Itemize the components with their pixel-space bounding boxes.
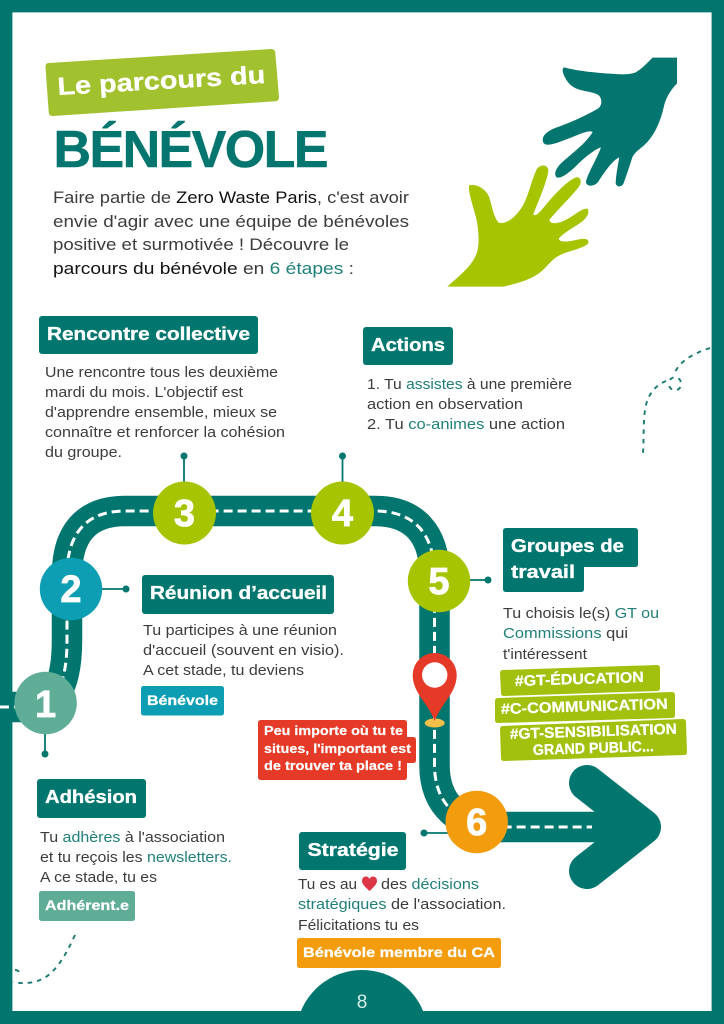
heading: Réunion d’accueil [150,583,327,603]
tag: GT-Sensibilisation: #GT-SENSIBILISATION [510,721,677,743]
text block: Une rencontre tous les deuxième [45,364,278,381]
step 6 [446,791,508,853]
connector 1 [42,730,48,758]
step 6: 6 [466,802,487,844]
icon: reaching hands [447,58,677,287]
text block: des décisions [381,876,479,893]
intro text: positive et surmotivée ! Découvre le [53,235,349,254]
step 5 [408,550,470,612]
badge: Bénévole membre du CA: Bénévole membre du CA [303,944,495,960]
text block: mardi du mois. L'objectif est [45,384,244,401]
intro text: parcours du bénévole en 6 étapes : [53,259,354,278]
text block [298,876,506,934]
badge: Bénévole: Bénévole [147,692,218,708]
tag: GT-Éducation: #GT-ÉDUCATION [515,669,644,690]
step 1: 1 [35,684,56,726]
heading [37,779,146,818]
heading [299,832,406,870]
callout: red message: situes, l'important est [264,742,412,756]
intro text: envie d'agir avec une équipe de bénévoles [53,212,409,231]
text block: d'accueil (souvent en visio). [143,642,344,659]
callout: red message: Peu importe où tu te [264,724,403,738]
panel: Adhésion [37,779,232,921]
tag: GT-Éducation [500,665,660,696]
road [0,511,640,827]
badge: Adhérent.e: Adhérent.e [45,897,129,913]
road centre dashes [0,511,592,827]
page number tab [297,970,427,1024]
heading [363,327,453,365]
badge: Bénévole membre du CA [297,938,501,968]
text block: Tu es au [298,876,357,893]
text block: A cet stade, tu deviens [143,662,304,679]
badge: Adhérent.e [39,891,135,921]
text block: A ce stade, tu es [40,869,157,886]
road arrow head [587,783,643,871]
connector 5 [468,576,492,584]
heading: travail [511,562,575,582]
callout: red message [258,720,416,780]
connector 2 [100,586,130,592]
tag: C-Communication [495,692,675,723]
icon: heart [362,876,377,891]
tag: GT-Sensibilisation: GRAND PUBLIC... [533,738,654,759]
heading: Groupes de [511,536,624,556]
icon: teal hand [543,58,677,186]
text block: d'apprendre ensemble, mieux se [45,404,277,421]
step 4 [311,482,374,544]
text block [503,605,659,663]
panel: Réunion d'accueil [141,575,344,716]
connector 3 [180,452,188,488]
callout: red message: de trouver ta place ! [264,759,402,773]
heading [142,575,334,614]
badge: Bénévole [141,686,224,716]
title label: Le parcours du [45,49,279,116]
text block: Tu choisis le(s) GT ou [503,605,659,622]
heading: Actions [371,335,445,355]
step 3 [153,482,216,544]
text block [40,829,232,886]
text block [45,364,285,461]
text block [367,376,572,433]
text block: t'intéressent [503,646,588,663]
step 4: 4 [332,493,353,535]
text block: Tu adhères à l'association [40,829,225,846]
connector 6 [420,830,450,836]
text block: Commissions qui [503,625,628,642]
step 1 [14,672,77,734]
connector 4 [339,452,346,488]
text block: connaître et renforcer la cohésion [45,424,285,441]
step 5: 5 [428,561,450,603]
text block: du groupe. [45,444,122,461]
panel: Groupes de travail [495,528,687,761]
text block: Félicitations tu es [298,917,419,934]
decorative dashed path bottom left [13,935,75,983]
text block: et tu reçois les newsletters. [40,849,232,866]
panel: Rencontre collective [39,316,285,461]
intro text [53,188,409,278]
heading: Stratégie [308,840,398,860]
text block: 2. Tu co-animes une action [367,416,565,433]
icon: green hand [447,166,588,287]
step 2: 2 [60,569,82,611]
tag: C-Communication: #C-COMMUNICATION [501,696,668,718]
title label: Le parcours du: Le parcours du [57,61,266,101]
text block: action en observation [367,396,523,413]
text block: 1. Tu assistes à une première [367,376,572,393]
text block: stratégiques de l'association. [298,896,506,913]
text block: Tu participes à une réunion [143,622,337,639]
step 3: 3 [174,493,195,535]
icon: map pin [413,653,457,728]
text block [143,622,344,679]
title: BÉNÉVOLE: BÉNÉVOLE [54,121,328,179]
panel: Actions [363,327,572,433]
decorative dashed path top right [643,348,710,453]
tag: GT-Sensibilisation [500,719,687,761]
heading [503,528,638,592]
intro text: Faire partie de Zero Waste Paris , c'est avoir [53,188,409,207]
step 2 [40,558,102,620]
heading [39,316,258,354]
heading: Adhésion [45,787,137,807]
page number tab: 8 [357,992,367,1013]
heading: Rencontre collective [47,324,250,344]
panel: Stratégie [297,832,506,968]
